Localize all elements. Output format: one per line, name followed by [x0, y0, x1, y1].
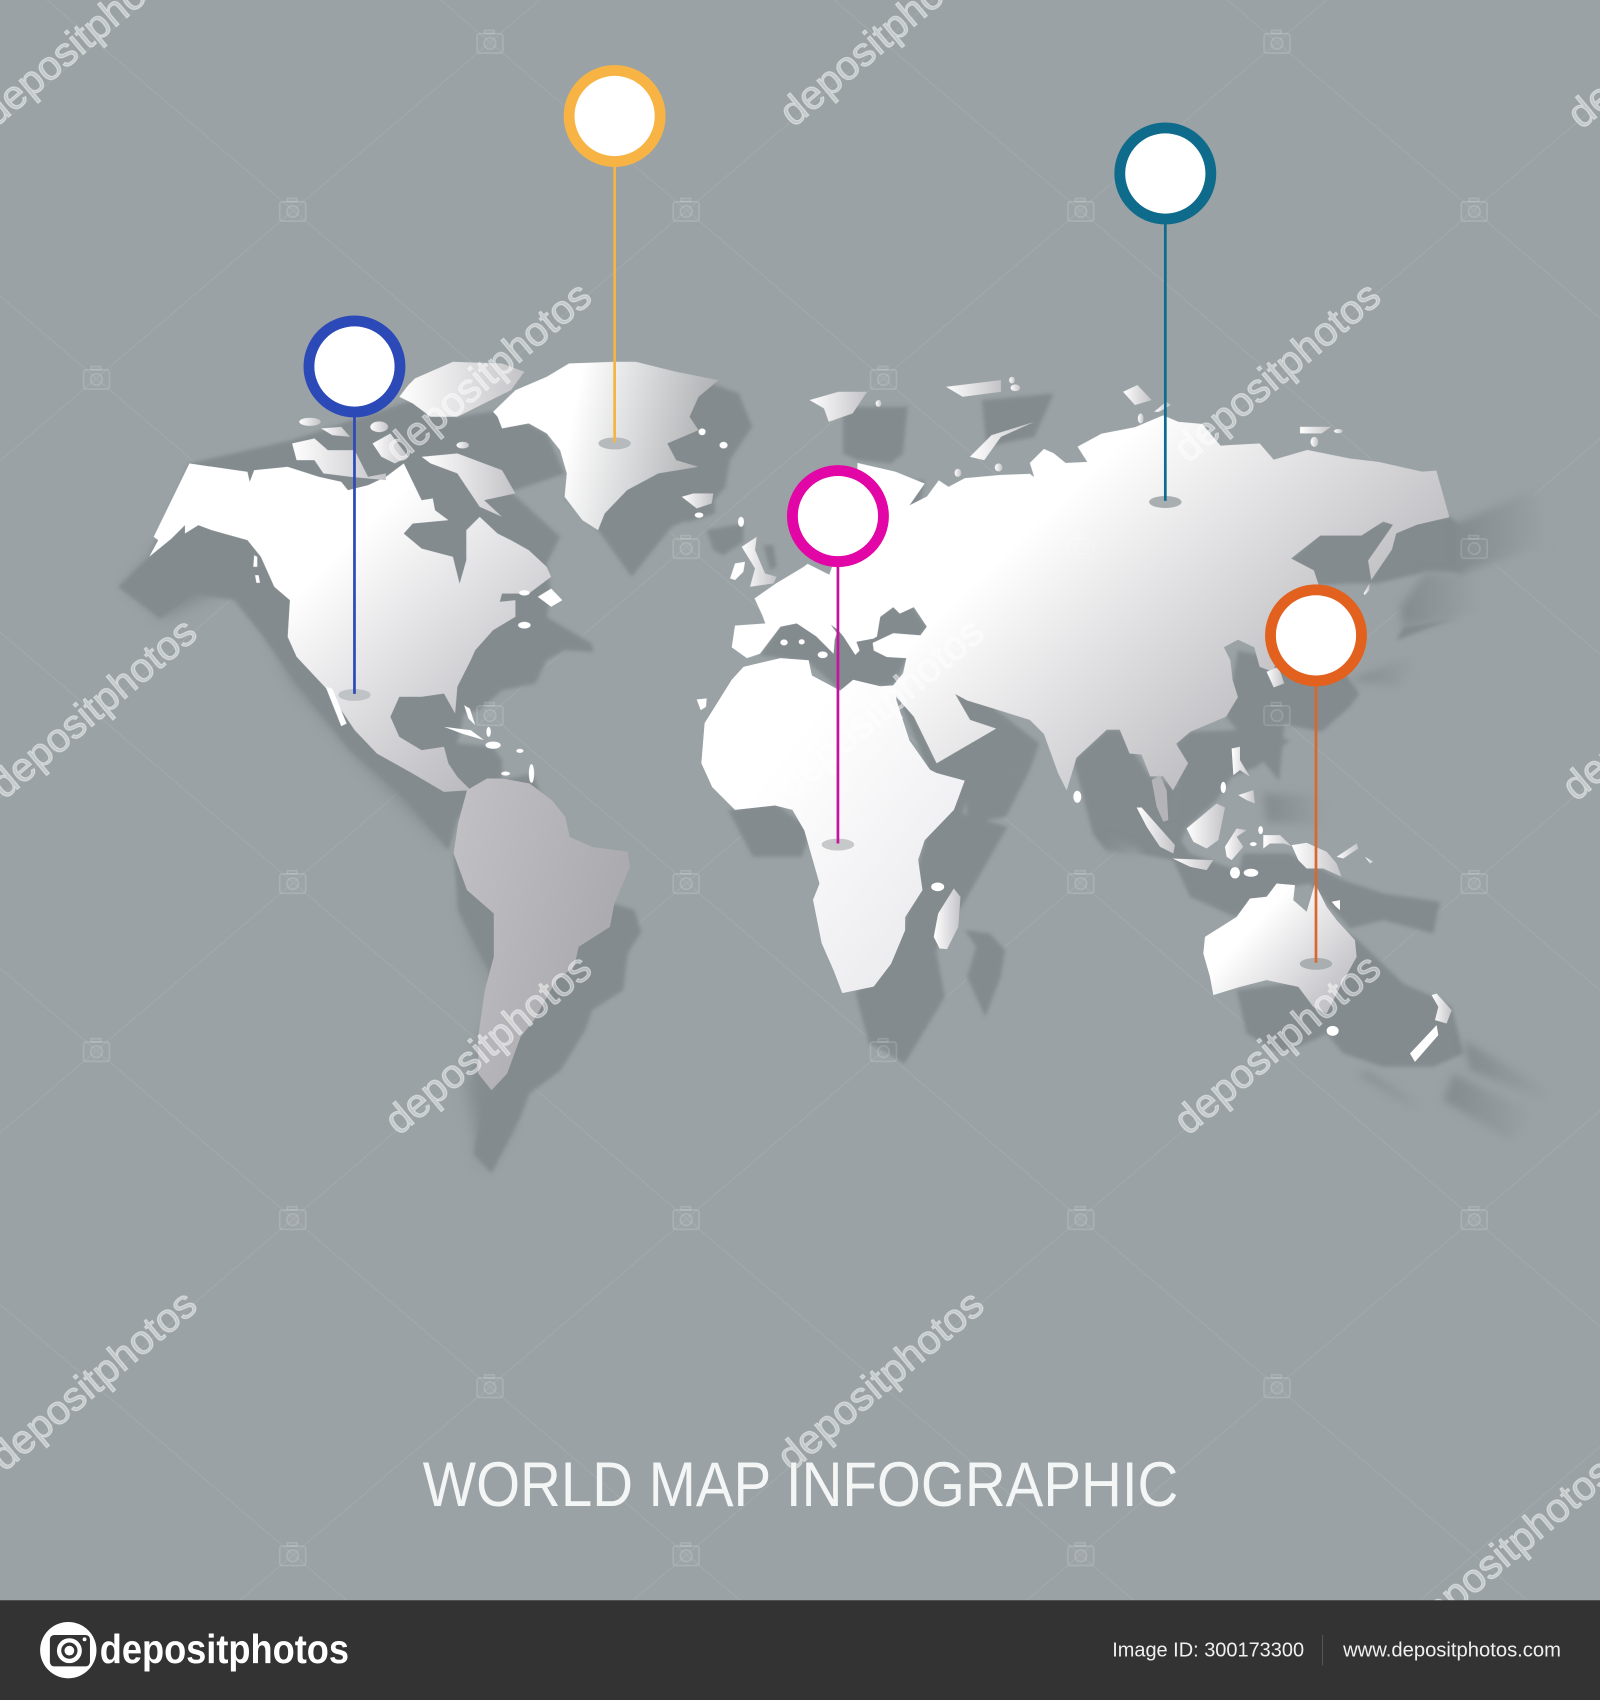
pin: orange, Australia: [1270, 590, 1362, 970]
pin: blue, North America: [309, 321, 400, 701]
watermark: camera icons: [83, 30, 1487, 1566]
Madagascar: [934, 889, 960, 949]
website url: www.depositphotos.com: [1342, 1639, 1561, 1662]
arctic islands: [292, 362, 524, 517]
shadows: Southeast Asia and Oceania: [1073, 730, 1463, 1067]
map: Arctic islands: [810, 377, 1369, 687]
mainland North America: [149, 463, 551, 792]
logo: camera icon: [40, 1622, 96, 1678]
shadows: Mediterranean, Red Sea, Gulf, North Atlantic: [680, 490, 1002, 773]
map: Southeast Asia, Australia and New Zealand: [1073, 747, 1452, 1062]
watermark: depositphotos repeat: depositphotos: [769, 1282, 992, 1479]
watermark: depositphotos repeat: depositphotos: [376, 946, 600, 1143]
watermark: depositphotos repeat: depositphotos: [1166, 946, 1389, 1143]
Malay peninsula: [1152, 775, 1168, 822]
map: Iceland, British Isles and Mediterranean islands: [682, 493, 828, 710]
map: South America: [454, 778, 630, 1090]
Australia: [1203, 883, 1357, 1013]
map: Greenland: [493, 362, 728, 530]
shadows: North Pacific: [1283, 517, 1463, 640]
map shadows: [118, 380, 1550, 1174]
watermark: depositphotos repeat: depositphotos: [1166, 273, 1389, 471]
pin: teal, Russia: [1120, 128, 1211, 508]
map: Eurasia: [732, 415, 1449, 790]
pin: yellow, Greenland: [569, 70, 660, 449]
map: North America: [149, 362, 562, 792]
watermark: depositphotos repeat: depositphotos: [769, 610, 992, 807]
pin: magenta, Africa: [792, 471, 883, 851]
Indonesia and Philippines: [1137, 747, 1373, 877]
map: Africa: [701, 658, 965, 993]
title: WORLD MAP INFOGRAPHIC: [423, 1450, 1178, 1520]
footer bar: [0, 1600, 1600, 1700]
image id: Image ID: 300173300: [1112, 1639, 1304, 1662]
New Zealand: [1432, 993, 1452, 1023]
watermark: depositphotos repeat: depositphotos: [376, 273, 600, 471]
coastal islands: [253, 555, 562, 783]
logo: wordmark: depositphotos: [100, 1626, 349, 1672]
